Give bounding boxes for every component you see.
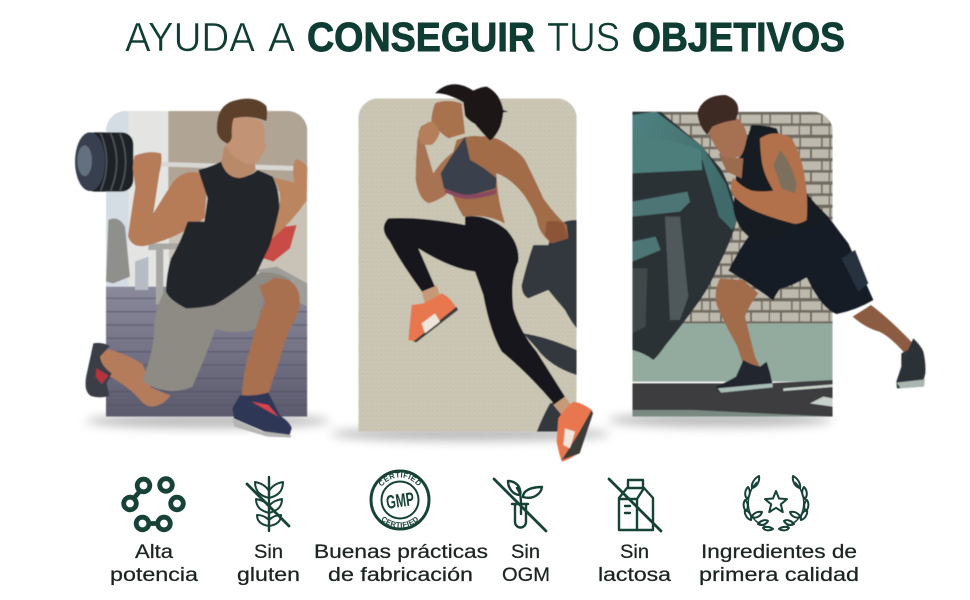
back foot and orange shoe	[553, 397, 571, 415]
back shoe	[896, 338, 925, 388]
label: ingredientes: Ingredientes de	[701, 541, 857, 563]
title: OBJETIVOS	[632, 14, 845, 60]
front shoe	[232, 392, 292, 437]
head	[224, 117, 266, 164]
icon: sin lactosa milk carton	[609, 479, 661, 531]
hand and forearm	[416, 122, 469, 203]
hair	[435, 84, 508, 141]
front arm	[467, 136, 568, 243]
label: sin OGM	[502, 541, 550, 586]
black tank top	[166, 162, 279, 308]
label: sin OGM: Sin	[511, 541, 540, 563]
left arm	[128, 152, 206, 246]
wall shadow	[522, 220, 577, 328]
shorts	[142, 272, 291, 391]
icon: alta potencia rings	[124, 479, 183, 530]
shorts	[728, 217, 873, 314]
weight plates	[75, 132, 133, 192]
label: sin gluten	[237, 541, 300, 586]
tank top	[733, 125, 828, 242]
label: ingredientes	[699, 541, 859, 586]
label: buenas prácticas	[314, 541, 488, 586]
label: alta potencia	[110, 541, 198, 586]
title: A	[268, 14, 296, 60]
icon: sin OGM plant in test tube	[494, 479, 546, 531]
back leg	[97, 347, 171, 406]
icon: GMP certified stamp	[370, 470, 430, 530]
right arm	[272, 159, 307, 239]
photo panel: man lunging with barbell	[75, 99, 330, 438]
label: ingredientes: primera calidad	[699, 564, 859, 586]
label: sin lactosa	[598, 541, 671, 586]
icon: GMP certified stamp: CERTIFIED	[382, 516, 418, 528]
neck	[221, 147, 256, 178]
label: sin lactosa: lactosa	[598, 564, 671, 586]
torso	[448, 136, 505, 223]
label: buenas prácticas: Buenas prácticas	[314, 541, 488, 563]
leggings	[384, 216, 565, 405]
front shoe	[716, 360, 773, 392]
hair	[697, 95, 738, 135]
back leg	[853, 305, 916, 355]
front leg	[716, 278, 763, 378]
photo panel: man pushing tyre	[608, 95, 925, 427]
head	[431, 101, 465, 138]
label: sin gluten: Sin	[254, 541, 283, 563]
label: alta potencia: Alta	[135, 541, 173, 563]
back shoe	[86, 343, 112, 397]
label: alta potencia: potencia	[110, 564, 198, 586]
head	[707, 118, 747, 158]
sports bra	[441, 137, 497, 197]
front foot and orange shoe	[422, 286, 440, 303]
label: sin gluten: gluten	[237, 564, 300, 586]
icon: GMP certified stamp: CERTIFIED	[379, 472, 421, 486]
title	[125, 14, 845, 60]
chest	[718, 153, 743, 178]
tyre	[632, 112, 737, 360]
photo panel: woman running	[330, 84, 610, 462]
hair	[217, 99, 267, 143]
icon: GMP certified stamp: GMP	[385, 489, 416, 514]
label: sin OGM: OGM	[502, 564, 550, 586]
barbell bar	[133, 163, 305, 169]
arm	[731, 133, 807, 224]
label: sin lactosa: Sin	[620, 541, 649, 563]
title: CONSEGUIR	[307, 14, 535, 60]
icon: laurel wreath with star	[744, 476, 808, 530]
title: AYUDA	[125, 14, 256, 60]
label: buenas prácticas: de fabricación	[328, 564, 473, 586]
hand	[418, 122, 440, 145]
front leg	[242, 277, 300, 397]
icon: sin gluten wheat	[247, 477, 289, 531]
title: TUS	[547, 14, 620, 60]
